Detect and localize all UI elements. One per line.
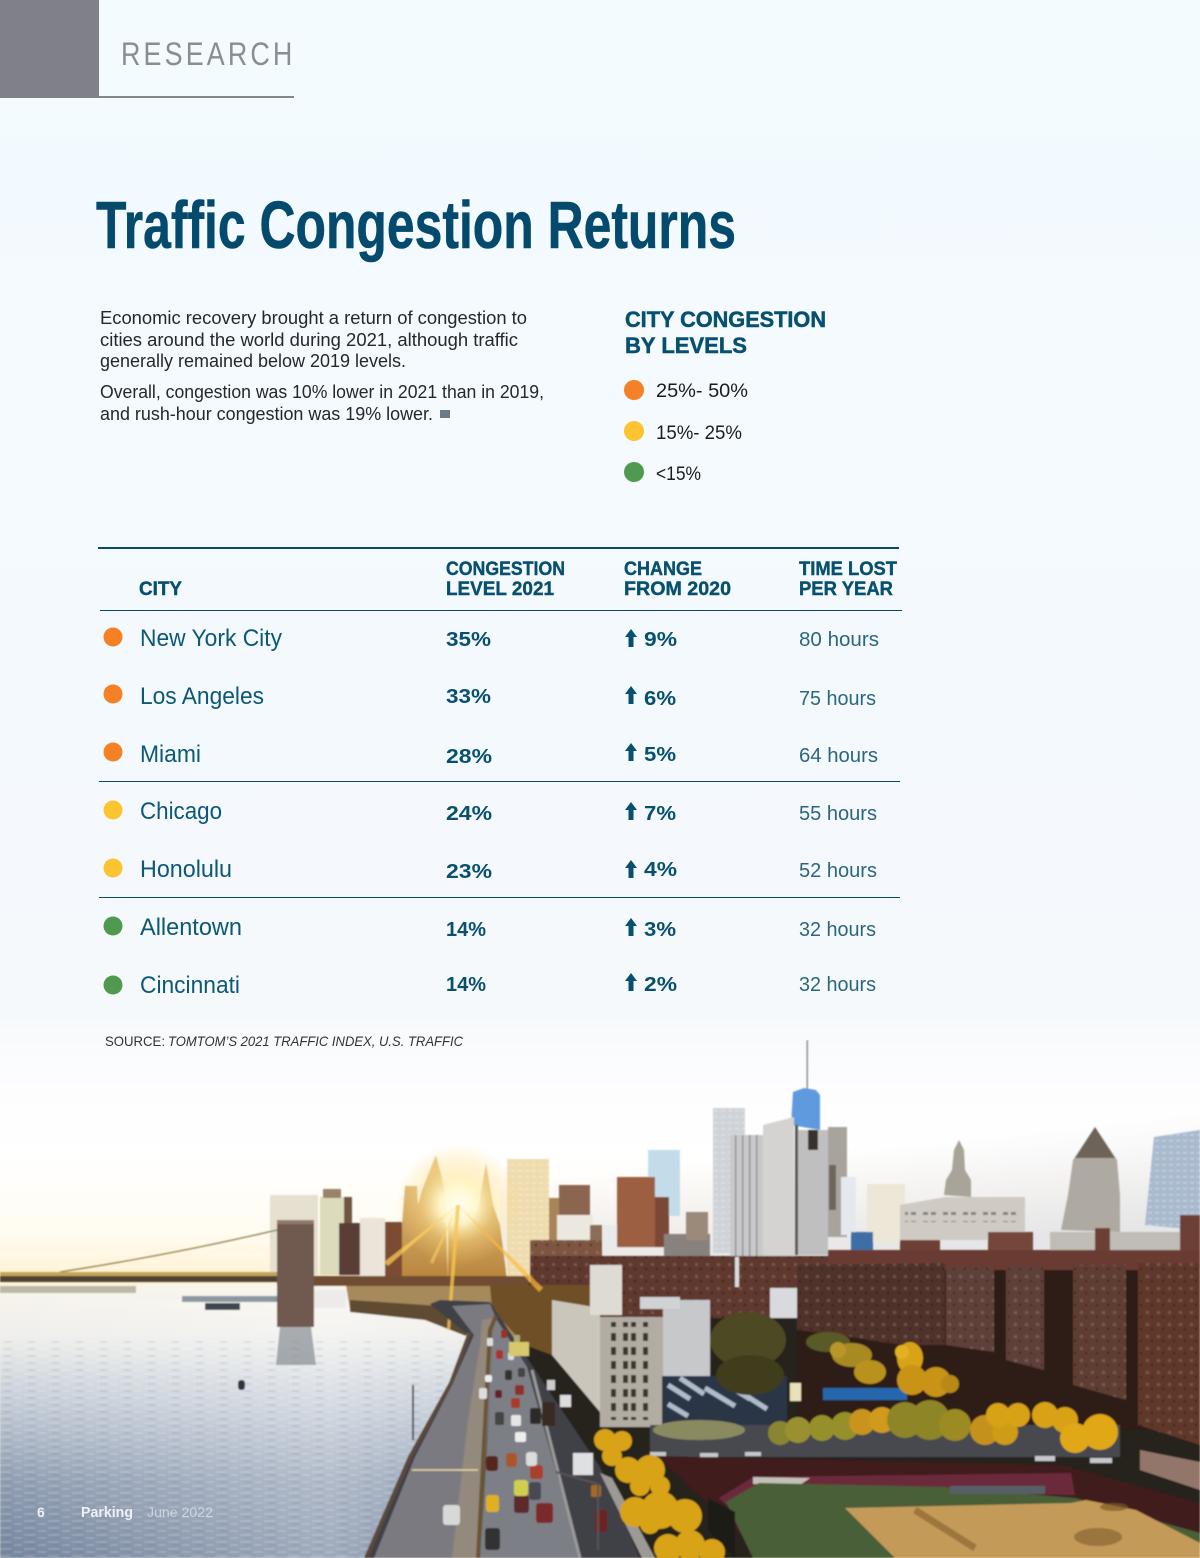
row: Chicago: 24% — [446, 803, 492, 825]
table: city congestion — [98, 547, 902, 999]
table header: LEVEL 2021 — [446, 579, 554, 600]
row: New York City — [104, 625, 879, 652]
row: Los Angeles — [104, 683, 876, 710]
skyline center towers — [603, 1040, 905, 1259]
row: Miami: Miami — [140, 741, 201, 768]
legend: city congestion by levels — [624, 307, 826, 485]
row: Cincinnati: 14% — [446, 974, 486, 996]
ground base — [470, 1250, 1200, 1558]
row: Chicago — [104, 798, 877, 825]
section tab: research — [0, 0, 294, 98]
row: Cincinnati — [104, 972, 876, 999]
ball field — [657, 1456, 1200, 1558]
table header: CONGESTION — [446, 559, 565, 580]
legend heading: CITY CONGESTION — [625, 307, 826, 332]
intro text block: Economic recovery brought a return of congestion to — [100, 308, 527, 328]
row: Honolulu: 52 hours — [799, 860, 877, 882]
row: New York City: 80 hours — [799, 629, 879, 651]
row: Los Angeles: 6% — [644, 688, 676, 710]
row: Los Angeles: 75 hours — [799, 688, 876, 710]
row: Honolulu — [104, 856, 877, 883]
row: Miami: 28% — [446, 746, 492, 768]
photo: New York skyline with road — [0, 1040, 1200, 1558]
intro text block: Overall, congestion was 10% lower in 2021 than in 2019, — [100, 382, 544, 402]
row: Miami — [104, 741, 878, 768]
row: New York City: 35% — [446, 629, 491, 651]
row: Cincinnati: 32 hours — [799, 974, 876, 996]
table header: TIME LOST — [799, 559, 897, 580]
section tab: research: RESEARCH — [121, 37, 292, 73]
intro text block — [100, 308, 544, 424]
row: Allentown — [104, 914, 876, 941]
water — [0, 1285, 468, 1558]
row of autumn trees — [653, 1400, 1118, 1453]
row: Allentown: 32 hours — [799, 919, 876, 941]
footer — [37, 1504, 213, 1521]
footer: Parking — [81, 1504, 133, 1521]
river-side buildings — [552, 1265, 797, 1427]
street lamp — [413, 1385, 598, 1550]
row: Cincinnati: Cincinnati — [140, 972, 240, 999]
brick apartment blocks — [530, 1215, 1200, 1445]
row: Los Angeles: Los Angeles — [140, 683, 264, 710]
legend item: high — [624, 380, 748, 402]
road with traffic — [365, 1300, 655, 1558]
skyline left — [270, 1155, 602, 1300]
table header — [139, 559, 897, 600]
sun flare — [384, 1143, 543, 1330]
yellow street trees — [594, 1429, 725, 1558]
table header: CHANGE — [624, 559, 702, 580]
gold trees behind the court — [830, 1342, 959, 1397]
intro text block: cities around the world during 2021, although traffic — [100, 330, 518, 350]
footer: June 2022 — [147, 1504, 213, 1520]
row: Chicago: Chicago — [140, 798, 222, 825]
table header: CITY — [139, 579, 182, 600]
park trees and parking lot — [650, 1312, 1200, 1490]
row: Chicago: 55 hours — [799, 803, 877, 825]
row: Honolulu: 23% — [446, 861, 492, 883]
legend item: medium — [624, 421, 742, 444]
legend item: low — [624, 462, 701, 485]
row: New York City: 9% — [644, 629, 677, 651]
cars — [443, 1330, 607, 1550]
table header: FROM 2020 — [624, 579, 731, 600]
row: Allentown: Allentown — [140, 914, 242, 941]
row: Miami: 5% — [644, 744, 676, 766]
legend item: low: <15% — [656, 464, 701, 485]
row: Los Angeles: 33% — [446, 686, 491, 708]
legend item: high: 25%- 50% — [656, 381, 748, 402]
source note: SOURCE: — [105, 1033, 165, 1049]
row: Allentown: 14% — [446, 919, 486, 941]
table header: PER YEAR — [799, 579, 893, 600]
legend heading: BY LEVELS — [625, 333, 747, 358]
legend heading — [625, 307, 826, 358]
skyline right landmarks — [900, 1127, 1200, 1252]
row: Miami: 64 hours — [799, 745, 878, 767]
footer: 6 — [37, 1504, 45, 1520]
row: Allentown: 3% — [644, 919, 676, 941]
row: New York City: New York City — [140, 625, 282, 652]
row: Honolulu: Honolulu — [140, 856, 232, 883]
title: Traffic Congestion Returns — [96, 188, 736, 263]
far shore and piers — [182, 1285, 600, 1355]
row: Chicago: 7% — [644, 803, 676, 825]
legend item: medium: 15%- 25% — [656, 423, 742, 444]
row: Cincinnati: 2% — [644, 974, 677, 996]
row: Honolulu: 4% — [644, 859, 677, 881]
source note: TOMTOM’S 2021 TRAFFIC INDEX, U.S. TRAFFIC — [168, 1033, 464, 1049]
intro text block: and rush-hour congestion was 19% lower. — [100, 404, 433, 424]
bridge with cables — [0, 1220, 529, 1327]
intro text block: generally remained below 2019 levels. — [100, 351, 406, 371]
